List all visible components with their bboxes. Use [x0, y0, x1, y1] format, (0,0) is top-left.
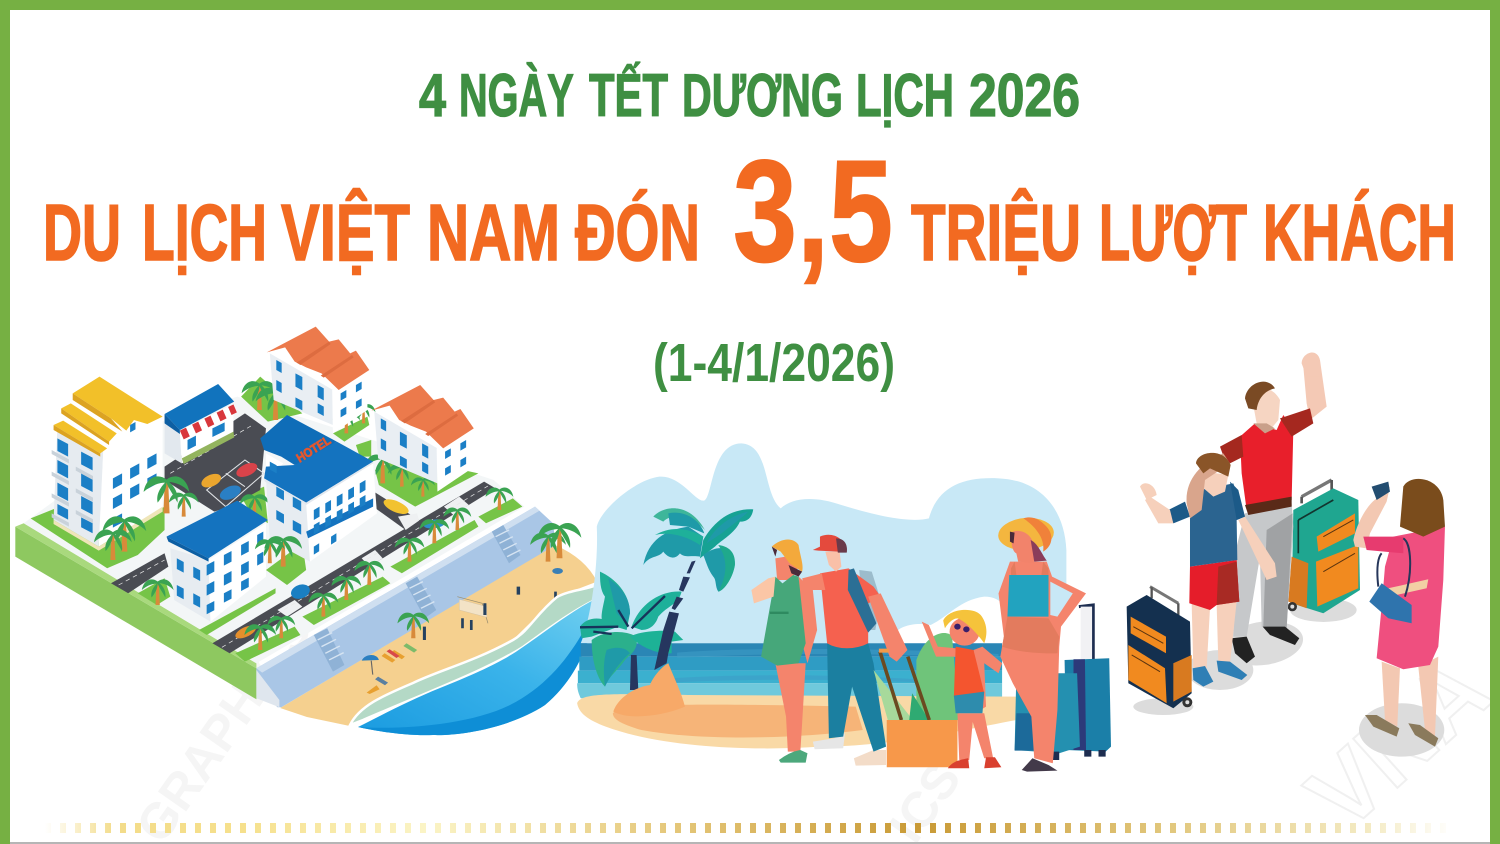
plants and orange bag	[874, 633, 959, 767]
suitcases blue	[1015, 605, 1111, 760]
woman with camera	[1353, 479, 1445, 747]
small palm	[580, 572, 683, 690]
heading line 2 left: NAM	[427, 188, 560, 277]
sand mound	[613, 663, 685, 716]
parking lines	[207, 460, 264, 507]
teal suitcase	[1288, 480, 1360, 613]
sand	[577, 694, 1016, 748]
big palm	[643, 508, 753, 670]
panel: isometric beach city	[15, 327, 597, 726]
watermark	[125, 604, 1500, 844]
key figure 3,5: 3,5	[733, 130, 893, 292]
palms middle	[94, 476, 269, 560]
sky blob	[581, 443, 1066, 643]
hotel building: HOTEL	[293, 433, 334, 465]
shop with striped awning	[165, 384, 237, 464]
dotted gold divider	[45, 823, 1455, 833]
heading line 2 left: ĐÓN	[575, 188, 700, 277]
house: orange roof back	[267, 327, 369, 433]
heading line 1: 2026	[969, 62, 1080, 129]
heading line 1: DƯƠNG	[682, 62, 843, 129]
front blue building	[166, 501, 268, 622]
woman in green dress	[751, 540, 817, 763]
palms back	[242, 381, 435, 497]
heading line 1: NGÀY	[459, 62, 574, 129]
heading line 2 right: LƯỢT	[1099, 188, 1247, 277]
boy in blue shirt	[1140, 453, 1277, 687]
hotel building	[260, 415, 377, 562]
clouds	[891, 597, 1020, 643]
seawall	[256, 507, 556, 707]
child with hat	[922, 610, 1002, 768]
ground shadows	[1133, 598, 1444, 757]
road markings	[119, 425, 488, 647]
heading line 1: TẾT	[589, 62, 668, 129]
sand	[280, 545, 597, 726]
grass patches	[31, 377, 522, 662]
sea with foam	[350, 585, 597, 735]
date range: (1-4/1/2026)	[653, 333, 895, 393]
cars	[199, 460, 446, 641]
heading line 2 left: VIỆT	[281, 188, 410, 277]
panel: isometric travellers	[1127, 353, 1445, 757]
beach palms and people	[362, 523, 581, 694]
house: orange roof right	[371, 385, 474, 492]
roads	[111, 413, 496, 653]
building: yellow roof	[52, 377, 163, 551]
heading line 1: LỊCH	[856, 62, 954, 129]
palms and sand mound	[580, 508, 753, 716]
panel: tropical beach family	[577, 443, 1111, 772]
sea stripes	[577, 643, 1002, 698]
navy suitcase	[1127, 587, 1192, 708]
heading line 2 right: TRIỆU	[911, 188, 1081, 277]
ground plate	[15, 397, 524, 699]
man in red shirt	[1220, 353, 1327, 663]
palms front	[142, 488, 513, 650]
heading line 2 left: DU	[43, 188, 121, 277]
heading line 2 left: LỊCH	[142, 188, 267, 277]
man with backpack	[802, 535, 907, 766]
woman with orange hat	[997, 516, 1086, 772]
heading line 1: 4	[419, 62, 447, 129]
bottom edge line	[10, 842, 1490, 844]
